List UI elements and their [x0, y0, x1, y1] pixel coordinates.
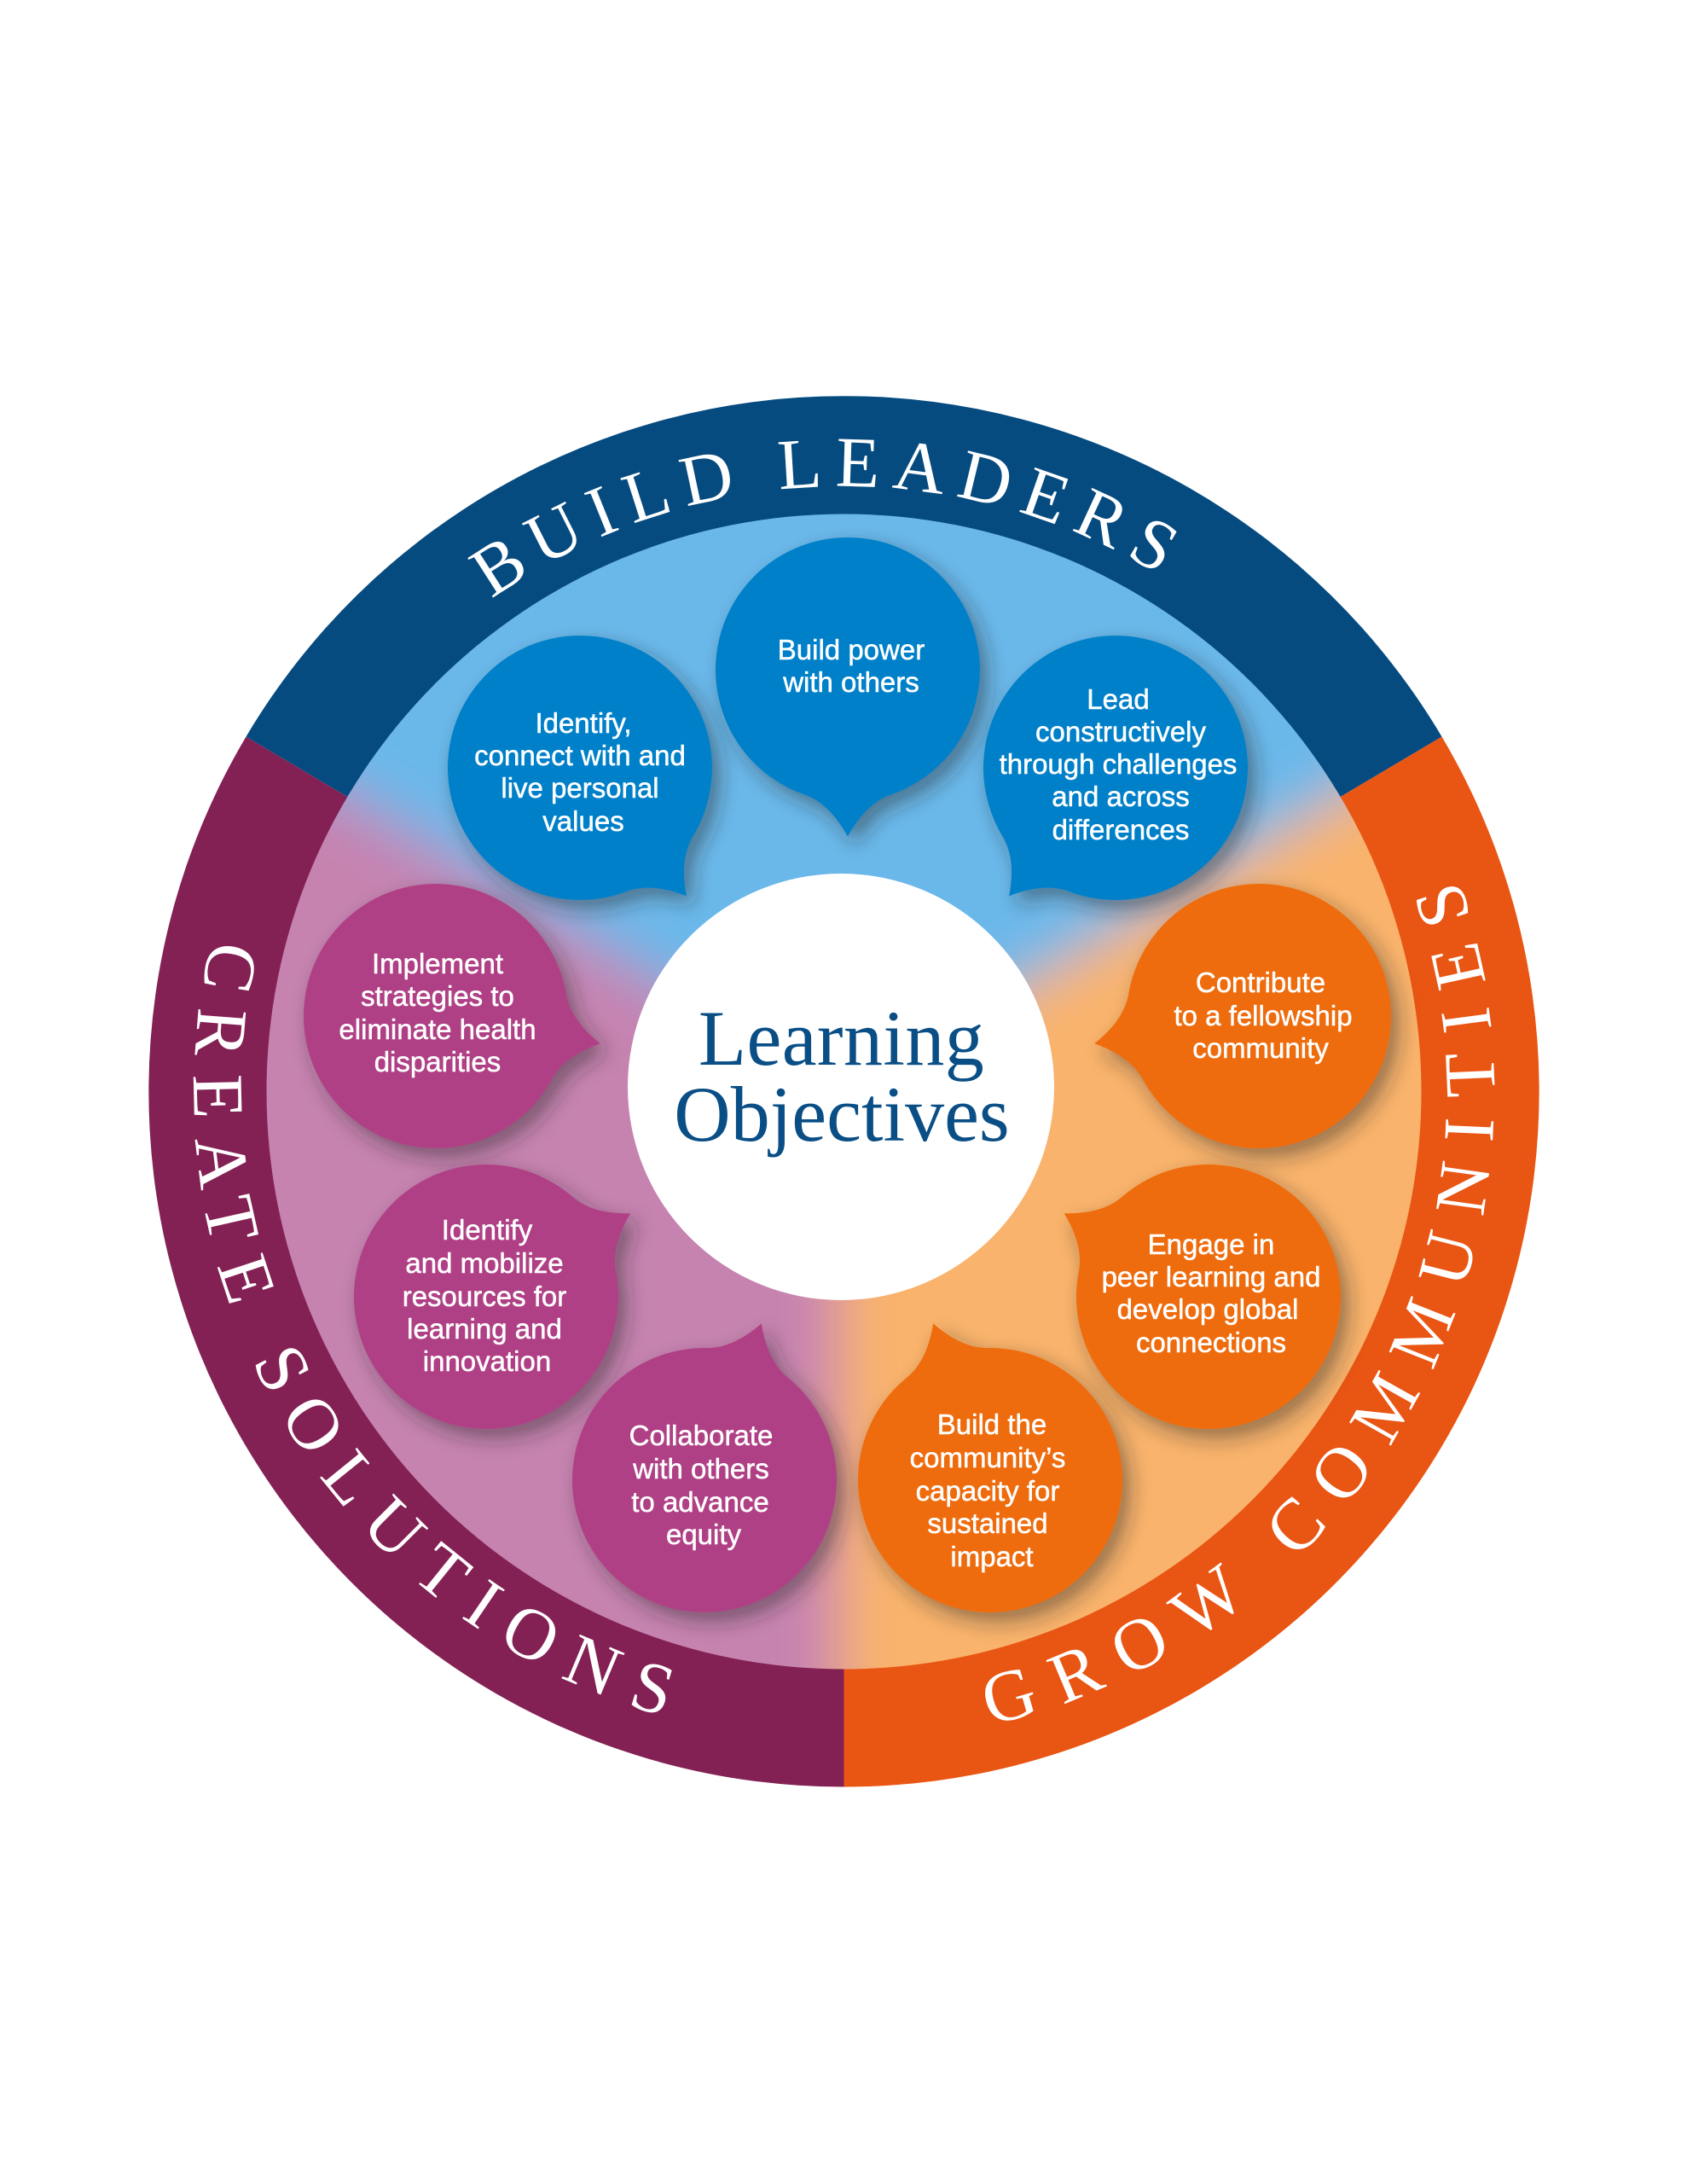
bubble: build the community's capacity [809, 1278, 1160, 1650]
bubble: collaborate with others: to advance [631, 1486, 769, 1518]
bubble: implement strategies: Implement [372, 948, 503, 979]
bubble: identify, connect with and live personal values: live personal [501, 772, 659, 804]
bubble: build power with others: with others [782, 666, 919, 698]
bubble: identify, connect with and live personal values: connect with and [474, 740, 686, 771]
bubble: identify and mobilize resources: Identify [442, 1214, 533, 1246]
centre circle with title: Objectives [674, 1071, 1010, 1158]
bubble: identify and mobilize resources: innovation [423, 1345, 551, 1377]
bubble: implement strategies: strategies to [361, 980, 514, 1012]
bubble: contribute to a fellowship community: to a fellowship [1174, 1000, 1353, 1031]
bubble: build the community's capacity: capacity for [916, 1475, 1059, 1507]
bubble: collaborate with others [535, 1278, 886, 1650]
learning objectives wheel diagram [148, 396, 1539, 1786]
bubble: contribute to a fellowship community [1073, 864, 1411, 1174]
bubble: contribute to a fellowship community: community [1192, 1032, 1329, 1064]
bubble: engage in peer learning [998, 1099, 1389, 1478]
bubble: collaborate with others: Collaborate [629, 1420, 773, 1451]
outer band: build leaders [246, 396, 1441, 1092]
bubble: identify, connect with and live personal values: Identify, [535, 707, 632, 739]
bubble: engage in peer learning: connections [1136, 1327, 1286, 1358]
bubble: engage in peer learning: peer learning and [1102, 1261, 1320, 1292]
bubble: identify and mobilize resources: learning and [407, 1313, 562, 1345]
bubble: implement strategies [284, 864, 622, 1174]
bubble: build the community's capacity: sustained [927, 1507, 1048, 1539]
outer band: create solutions [148, 737, 844, 1786]
bubble: engage in peer learning: Engage in [1148, 1228, 1274, 1260]
bubble: identify, connect with and live personal values: values [542, 805, 624, 837]
bubble: identify and mobilize resources: resources for [403, 1281, 566, 1312]
bubble: collaborate with others: equity [666, 1519, 742, 1550]
bubble: implement strategies: disparities [374, 1046, 501, 1077]
bubble: lead constructively: and across [1052, 781, 1190, 812]
outer band: grow communities [844, 737, 1539, 1786]
bubble: contribute to a fellowship community: Contribute [1196, 967, 1325, 998]
heading: grow communities: GROW COMMUNITIES [985, 886, 1494, 1721]
bubble: build the community's capacity: community’s [910, 1442, 1065, 1473]
bubble: identify, connect with and live personal values [394, 582, 788, 980]
bubble: lead constructively: differences [1052, 814, 1189, 845]
bubble: lead constructively: Lead [1087, 683, 1150, 715]
bubble: engage in peer learning: develop global [1117, 1293, 1298, 1325]
bubble: identify and mobilize resources [305, 1099, 697, 1478]
bubble: lead constructively: through challenges [1000, 748, 1237, 780]
bubble: identify and mobilize resources: and mobilize [405, 1247, 564, 1279]
bubble: lead constructively: constructively [1035, 716, 1206, 747]
bubble: lead constructively [907, 582, 1301, 980]
heading: build leaders: BUILD LEADERS [467, 439, 1177, 597]
bubble: collaborate with others: with others [632, 1453, 769, 1484]
bubble: build the community's capacity: impact [950, 1541, 1034, 1572]
bubble: build power with others [716, 537, 980, 836]
bubble: build power with others: Build power [778, 634, 925, 665]
heading: create solutions: CREATE SOLUTIONS [193, 946, 672, 1713]
centre circle with title: Learning [699, 995, 984, 1082]
bubble: implement strategies: eliminate health [339, 1014, 536, 1045]
inner disc with blended colour sectors [266, 514, 1421, 1669]
centre circle with title [628, 874, 1054, 1300]
bubble: build the community's capacity: Build the [937, 1409, 1046, 1440]
